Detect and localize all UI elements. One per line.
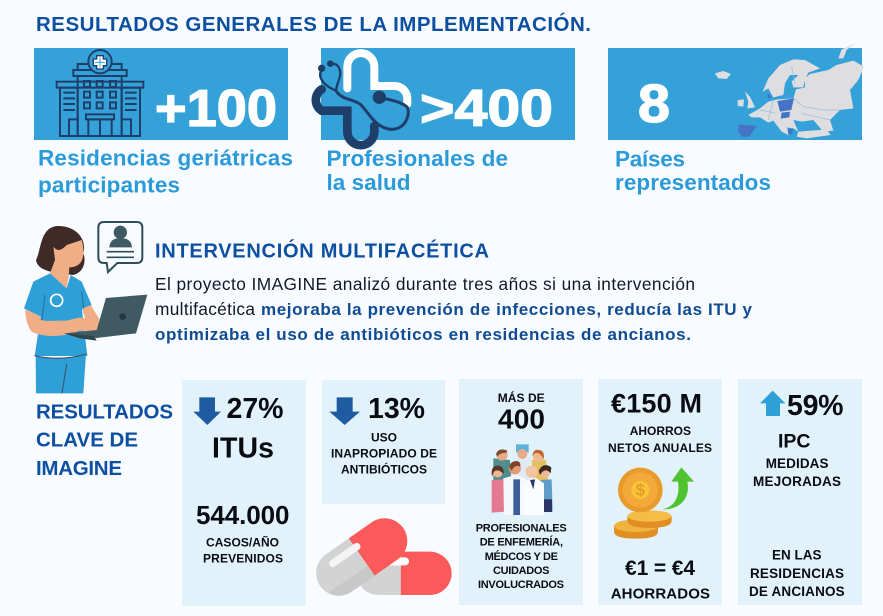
text block: intervention description: optimizaba el uso de antibióticos en residencias de ancianos. (155, 325, 691, 344)
illustration: nurse with laptop (24, 222, 147, 393)
icon: hospital (57, 50, 143, 136)
illustration: healthcare team (492, 444, 553, 515)
stat label: residencias: Residencias geriátricas (38, 146, 293, 171)
caption: profesionales (476, 522, 567, 591)
caption: en las residencias: DE ANCIANOS (749, 584, 845, 599)
stat number: 8: 8 (638, 74, 670, 134)
stat label: paises (615, 146, 771, 195)
stat: 544.000: 544.000 (196, 500, 290, 530)
neck and face (50, 240, 83, 288)
stat: 400: 400 (498, 403, 545, 434)
panel: profesionales involucrados (459, 379, 583, 605)
panel: ahorros (598, 379, 722, 605)
stat label: residencias: participantes (38, 173, 180, 198)
stat box: paises (608, 48, 862, 140)
map: europe (715, 43, 864, 138)
stat label: profesionales (326, 146, 508, 195)
stat label: paises: representados (615, 170, 771, 195)
caption: casos/año prevenidos (203, 535, 283, 566)
stat label: paises: Países (615, 146, 685, 172)
heading: resultados clave: IMAGINE (36, 457, 122, 480)
laptop (64, 295, 147, 338)
scrub top (24, 273, 92, 356)
caption: uso inapropiado: ANTIBIÓTICOS (341, 462, 427, 477)
caption: profesionales: MÉDCOS Y DE (485, 550, 558, 563)
caption: en las residencias: RESIDENCIAS (750, 566, 844, 581)
icon: medical cross with stethoscope (316, 53, 408, 145)
stat: 13%: 13% (368, 393, 425, 425)
stat label: residencias (38, 146, 293, 198)
caption: ahorros netos (608, 424, 712, 455)
icon: coins with green arrow (614, 467, 694, 539)
panel: IPC (738, 379, 862, 605)
stat box: residencias (34, 48, 288, 140)
caption: medidas mejoradas (753, 456, 841, 489)
stat: ITUs: ITUs (212, 433, 274, 465)
heading: resultados clave: CLAVE DE (36, 429, 138, 452)
caption: medidas mejoradas: MEDIDAS (766, 456, 828, 471)
icon: down arrow (329, 397, 360, 425)
stat: 27%: 27% (226, 393, 284, 425)
caption: más de: MÁS DE (498, 390, 545, 405)
right forearm (83, 305, 100, 329)
heading: resultados clave (36, 400, 173, 480)
caption: en las residencias: EN LAS (772, 547, 822, 562)
panel: ITUs (182, 380, 306, 606)
text block: intervention description: mejoraba la prevención de infecciones, reducía las ITU y (261, 300, 753, 319)
caption: profesionales: INVOLUCRADOS (478, 579, 564, 591)
caption: casos/año prevenidos: CASOS/AÑO (206, 535, 279, 550)
speech bubble with profile icon (98, 222, 142, 272)
stat label: profesionales: la salud (326, 170, 410, 195)
title: RESULTADOS GENERALES DE LA IMPLEMENTACIÓN. (36, 12, 591, 36)
stat: IPC: IPC (778, 430, 810, 452)
caption: uso inapropiado: INAPROPIADO DE (331, 447, 437, 461)
caption: profesionales: DE ENFEMERÍA, (480, 535, 563, 548)
hair back (36, 226, 85, 275)
stat: 59%: 59% (787, 390, 844, 422)
caption: ahorros netos: NETOS ANUALES (608, 441, 712, 455)
caption: uso inapropiado: USO (371, 431, 397, 445)
stat number: +100: +100 (155, 80, 277, 138)
text block: intervention description: El proyecto IMAGINE analizó durante tres años si una intervención (155, 274, 695, 294)
arm (25, 309, 100, 336)
stat: €150 M: €150 M (611, 388, 702, 418)
caption: ahorrados: AHORRADOS (611, 586, 710, 603)
panel: profesionales stat (316, 48, 575, 195)
scrub collar line and badge (42, 292, 84, 322)
caption: profesionales: CUIDADOS (493, 565, 550, 577)
text block: intervention description: multifacética (155, 299, 255, 319)
caption: ahorros netos: AHORROS (630, 424, 691, 438)
text block: intervention description (155, 274, 753, 344)
trousers (36, 354, 86, 393)
heading: intervención multifacética: INTERVENCIÓN MULTIFACÉTICA (155, 239, 489, 263)
panel: antibióticos (322, 380, 445, 504)
heading: resultados clave: RESULTADOS (36, 400, 173, 423)
caption: en las residencias (749, 547, 845, 599)
caption: casos/año prevenidos: PREVENIDOS (203, 552, 283, 566)
panel: residencias stat (34, 48, 293, 198)
stat number: >400: >400 (420, 80, 553, 138)
caption: medidas mejoradas: MEJORADAS (753, 474, 841, 489)
icon: pills (307, 509, 452, 605)
caption: profesionales: PROFESIONALES (476, 522, 567, 534)
panel: paises stat (608, 43, 864, 195)
icon: coins with green arrow: $ (636, 481, 646, 500)
stat label: profesionales: Profesionales de (326, 146, 508, 171)
icon: down arrow (193, 397, 221, 425)
stat: €1 = €4: €1 = €4 (625, 557, 695, 580)
icon: up arrow (760, 391, 785, 416)
caption: uso inapropiado (331, 431, 437, 477)
stat box: profesionales (321, 48, 575, 140)
